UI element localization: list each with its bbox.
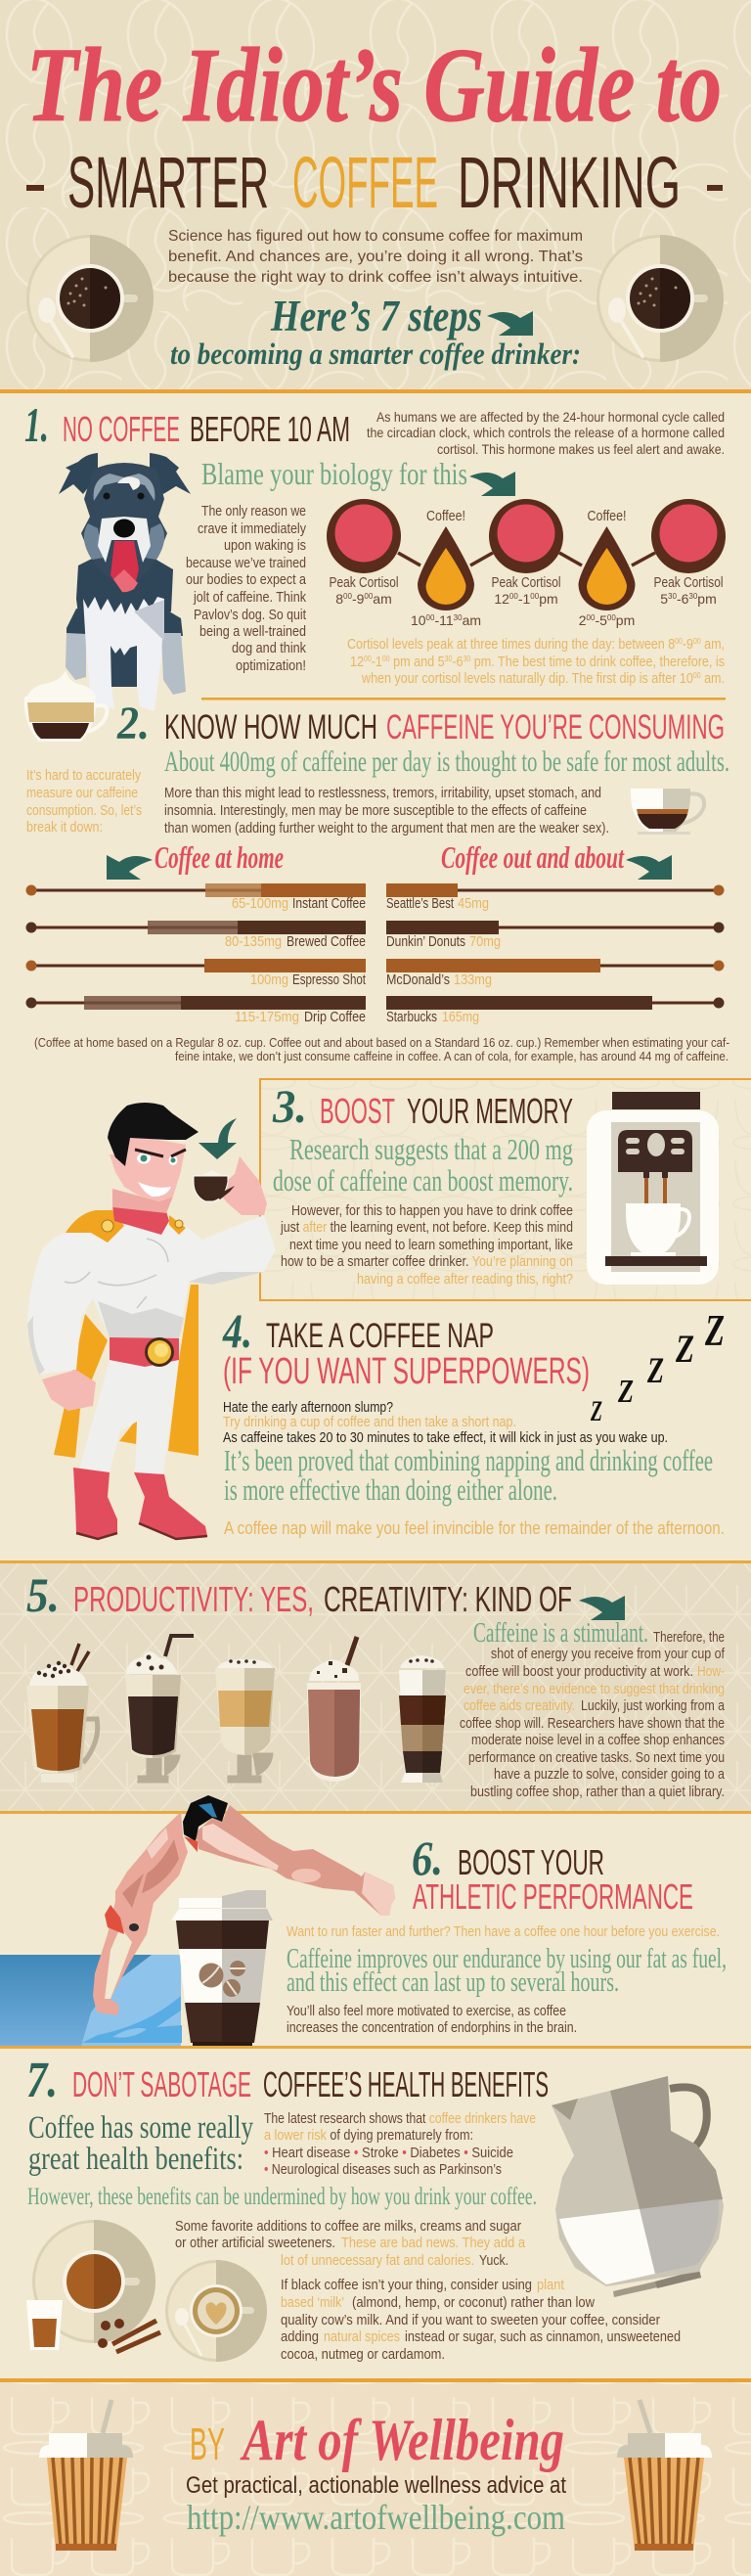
heading: step 4: TAKE A COFFEE NAP	[266, 1317, 494, 1355]
text: cortisol callout: 30	[464, 655, 471, 663]
chart labels: 30	[668, 592, 677, 601]
text: lower risk list	[264, 2111, 536, 2178]
chart labels: 00	[426, 613, 435, 622]
chart labels	[329, 508, 724, 628]
label: starbucks: 165mg	[442, 1009, 479, 1025]
label: dunkin' donuts: 70mg	[469, 933, 501, 950]
text: health benefits callout	[28, 2110, 253, 2177]
illustration: dog	[59, 453, 191, 711]
chart labels: 00	[364, 592, 374, 601]
heading: here's 7 steps: Here’s 7 steps	[270, 292, 482, 340]
chart labels: am	[373, 591, 392, 607]
text: cortisol callout: Cortisol levels peak at three times during the day: between 8	[347, 637, 728, 653]
subtitle	[26, 142, 723, 223]
text: pavlov's dog: upon waking is	[224, 538, 306, 554]
label: instant coffee: 65-100mg	[232, 895, 288, 912]
text: plant based milk: instead or sugar, such as cinnamon, unsweetened	[405, 2328, 681, 2345]
text: stimulant: How-	[697, 1663, 725, 1680]
text: break it down: It’s hard to accurately	[26, 768, 142, 784]
orange divider	[0, 389, 751, 393]
heading: step 2: 2.	[116, 698, 150, 749]
label: dunkin' donuts: Dunkin’ Donuts	[386, 933, 465, 950]
heading: step 7: DON’T SABOTAGE	[72, 2064, 251, 2104]
text: break it down: break it down:	[26, 820, 103, 836]
intro text: benefit. And chances are, you’re doing it all wrong. That’s	[168, 249, 583, 265]
label: drip coffee: Drip Coffee	[304, 1009, 366, 1025]
text: stimulant	[460, 1618, 726, 1800]
icon: sleeping z letters: Z	[675, 1327, 694, 1371]
chart labels: 00	[530, 592, 540, 601]
chart labels: -6	[677, 591, 689, 607]
text: memory callout: Research suggests that a 200 mg	[289, 1132, 573, 1166]
icon: latte cup	[24, 670, 107, 742]
orange divider	[0, 2046, 751, 2049]
text: nap body: Hate the early afternoon slump?	[223, 1400, 393, 1416]
chart labels: 8	[335, 591, 343, 607]
text: cortisol callout: 00	[693, 671, 701, 680]
illustration: drink 4	[307, 1637, 361, 1782]
chart labels: Peak Cortisol	[491, 574, 561, 591]
illustration: pool water	[0, 1955, 182, 2046]
illustration: milk jug	[552, 2076, 724, 2297]
heading: step 3	[272, 1081, 573, 1133]
text: stimulant: Caffeine is a stimulant.	[473, 1618, 648, 1649]
bar: mcdonald's	[386, 959, 724, 972]
arrow: pointing to cup	[199, 1118, 237, 1159]
illustration: drink 1	[26, 1644, 98, 1783]
heading: step 5	[26, 1567, 572, 1622]
text: additions: These are bad news. They add a	[341, 2235, 526, 2251]
text: cortisol callout: 00	[382, 655, 390, 663]
text: pavlov's dog: dog and think	[232, 641, 307, 656]
text: memory callout	[273, 1132, 573, 1198]
text: break it down: measure our caffeine	[26, 786, 138, 801]
illustration: drink 3	[215, 1659, 275, 1783]
icon: sleeping z letters: Z	[590, 1395, 602, 1427]
text: plant based milk: quality cow’s milk. And if you want to sweeten your coffee, consider	[281, 2312, 660, 2328]
text: lower risk list: • Neurological diseases such as Parkinson’s	[264, 2162, 502, 2178]
text: cortisol callout: am,	[701, 637, 725, 653]
heading: step 6	[412, 1830, 693, 1917]
text: circadian clock	[367, 409, 725, 457]
chart labels: 00	[607, 613, 616, 622]
label: espresso shot	[250, 972, 367, 988]
chart labels: -11	[434, 612, 454, 628]
icon: sleeping z letters: Z	[617, 1374, 634, 1410]
panel: step 1	[24, 397, 726, 742]
text: additions	[175, 2218, 526, 2269]
bar: seattle's best	[386, 883, 724, 897]
text: pavlov's dog: crave it immediately	[198, 521, 307, 537]
panel: footer	[0, 2378, 751, 2576]
icon: espresso machine	[587, 1092, 719, 1285]
text: plant based milk: cocoa, nutmeg or cardamom.	[281, 2346, 445, 2363]
heading: step 1: 1.	[24, 397, 49, 452]
text: memory callout: dose of caffeine can boost memory.	[273, 1163, 573, 1198]
text: nap body: As caffeine takes 20 to 30 minutes to take effect, it will kick in just as you wake up.	[223, 1430, 668, 1446]
icon: latte with heart	[165, 2260, 267, 2362]
intro text: because the right way to drink coffee isn’t always intuitive.	[168, 269, 583, 286]
text: cortisol callout: am.	[701, 671, 725, 687]
text: lower risk list: a lower risk of dying prematurely from:	[264, 2128, 473, 2144]
heading: step 5: 5.	[26, 1567, 60, 1622]
illustration: superhero	[27, 1103, 276, 1539]
chart: coffee out and about bars	[386, 883, 724, 1025]
text: stimulant: coffee will boost your productivity at work.	[465, 1663, 693, 1680]
arrow	[579, 1596, 625, 1620]
text: cortisol callout: -6	[452, 655, 464, 670]
peak cortisol 5:30-6:30pm	[651, 499, 726, 573]
icon: small coffee cup	[631, 789, 704, 835]
text: endurance callout	[287, 1943, 727, 1998]
text: nap body: Try drinking a cup of coffee and then take a short nap.	[223, 1415, 516, 1430]
illustration: diver	[93, 1795, 395, 2015]
text: cortisol callout: 00	[675, 637, 683, 646]
header panel	[0, 0, 751, 390]
arrow	[469, 472, 515, 496]
panel: step 5	[0, 1560, 751, 1814]
text: cortisol callout	[347, 637, 725, 687]
subtitle: SMARTER	[67, 142, 269, 223]
label: espresso shot: 100mg	[250, 972, 288, 988]
heading: step 4	[222, 1303, 590, 1392]
label: instant coffee: Instant Coffee	[292, 895, 366, 912]
heading: step 6: 6.	[412, 1830, 443, 1885]
chart: cortisol timeline	[327, 499, 726, 628]
intro text: Science has figured out how to consume coffee for maximum	[168, 228, 583, 245]
chart labels: 2	[579, 612, 587, 628]
chart labels: am	[463, 612, 481, 628]
heading: step 3: 3.	[272, 1081, 307, 1133]
heading: step 3: YOUR MEMORY	[407, 1091, 573, 1131]
heading: coffee out and about: Coffee out and about	[441, 839, 625, 875]
text: additions: Some favorite additions to coffee are milks, creams and sugar	[175, 2218, 521, 2235]
text: pavlov's dog: The only reason we	[201, 504, 306, 520]
text: pavlov's dog: jolt of caffeine. Think	[193, 590, 307, 606]
text: memory body: However, for this to happen you have to drink coffee	[291, 1203, 573, 1219]
heading: step 1: BEFORE 10 AM	[190, 409, 350, 449]
text: plant based milk: (almond, hemp, or coconut) rather than low	[352, 2294, 595, 2311]
text: cortisol callout: pm and 5	[390, 655, 445, 670]
icon: right takeaway cup	[617, 2400, 712, 2551]
bar: brewed coffee	[25, 921, 366, 934]
text: additions: Yuck.	[479, 2252, 508, 2269]
heading: to becoming a smarter coffee drinker: to becoming a smarter coffee drinker:	[170, 337, 581, 371]
bar: dunkin' donuts	[386, 921, 724, 934]
icon: left coffee cup from above	[26, 235, 154, 362]
label: brewed coffee	[225, 933, 366, 950]
icon: saucer with coffee, glass and cinnamon	[26, 2220, 160, 2352]
label: seattle's best: Seattle’s Best	[386, 895, 455, 912]
text: stimulant: Therefore, the	[653, 1629, 725, 1646]
label: brewed coffee: Brewed Coffee	[287, 933, 366, 950]
text: pavlov's dog: optimization!	[236, 658, 306, 674]
bar: instant coffee	[25, 883, 366, 897]
text: plant based milk: based ‘milk’	[281, 2294, 344, 2311]
text: memory body: next time you need to learn something important, like	[289, 1238, 573, 1253]
panel: step 2	[25, 698, 729, 1063]
text: endorphins: You’ll also feel more motivated to exercise, as coffee	[287, 2004, 566, 2019]
text: additions: lot of unnecessary fat and calories.	[281, 2252, 474, 2269]
text: stimulant: coffee aids creativity.	[464, 1697, 575, 1714]
label: brewed coffee: 80-135mg	[225, 933, 282, 950]
text: lower risk list: The latest research shows that coffee drinkers have	[264, 2111, 536, 2127]
chart labels: pm	[697, 591, 717, 607]
text: nap body	[223, 1400, 668, 1446]
text: lower risk list: • Heart disease • Stroke • Diabetes • Suicide	[264, 2146, 513, 2161]
chart labels: -9	[352, 591, 365, 607]
coffee drop 10-11:30am	[418, 526, 474, 610]
text: health benefits callout: Coffee has some really	[28, 2110, 253, 2146]
text: more than this	[164, 785, 609, 836]
chart labels: Peak Cortisol	[653, 574, 724, 591]
text: more than this: More than this might lead to restlessness, tremors, irritability, upset stomach, and	[164, 785, 601, 801]
text: cortisol callout: 12	[350, 655, 366, 670]
icon: sleeping z letters: Z	[704, 1305, 725, 1355]
heading: step 6: BOOST YOUR	[458, 1842, 604, 1882]
text: memory body: having a coffee after reading this, right?	[357, 1272, 573, 1288]
text: wellness advice: Get practical, actionable wellness advice at	[186, 2472, 566, 2499]
text: however callout: However, these benefits can be undermined by how you drink your coffee.	[27, 2184, 537, 2210]
text: pavlov's dog: because we’ve trained	[186, 556, 306, 571]
chart labels: Coffee!	[587, 508, 626, 524]
icon: takeaway coffee cup	[171, 1890, 273, 2047]
chart labels: 5	[660, 591, 668, 607]
chart labels: 00	[509, 592, 518, 601]
text: more than this: than women (adding further weight to the argument that men are the weaker sex).	[164, 820, 609, 836]
bar: drip coffee	[25, 996, 366, 1010]
chart labels: 00	[343, 592, 352, 601]
panel: step 4	[222, 1303, 725, 1538]
text: plant based milk	[281, 2277, 681, 2363]
heading: step 7: COFFEE’S HEALTH BENEFITS	[263, 2064, 549, 2104]
label: mcdonald's: 133mg	[454, 972, 492, 988]
chart labels: pm	[539, 591, 558, 607]
text: footnote	[34, 1035, 729, 1063]
intro text	[168, 228, 583, 286]
illustration: drink 5	[399, 1655, 446, 1783]
heading: coffee at home: Coffee at home	[155, 839, 284, 875]
text: plant based milk: If black coffee isn’t your thing, consider using	[281, 2277, 532, 2293]
text: nap callout	[224, 1443, 713, 1507]
text: cortisol callout: 00	[693, 637, 701, 646]
chart labels: 10	[411, 612, 426, 628]
text: cortisol callout: -9	[683, 637, 693, 653]
peak cortisol 12-1pm	[489, 499, 563, 573]
chart: coffee at home bars	[25, 883, 367, 1025]
text: additions: or other artificial sweeteners.	[175, 2235, 335, 2251]
text: memory body: just after the learning event, not before. Keep this mind	[280, 1220, 573, 1236]
icon: right coffee cup from above	[596, 235, 724, 362]
icon: sleeping z letters: Z	[646, 1351, 664, 1391]
chart labels: 30	[688, 592, 698, 601]
heading: step 3: BOOST	[320, 1091, 395, 1131]
heading: step 1: NO COFFEE	[63, 409, 180, 449]
illustration: drink 2	[125, 1636, 194, 1783]
text: stimulant: Luckily, just working from a	[581, 1697, 726, 1714]
bar: espresso shot	[25, 959, 366, 972]
label: instant coffee	[232, 895, 366, 912]
divider	[201, 698, 726, 700]
label: espresso shot: Espresso Shot	[292, 972, 367, 988]
chart labels: 00	[587, 613, 596, 622]
label: seattle's best: 45mg	[458, 895, 489, 912]
label: drip coffee: 115-175mg	[235, 1009, 299, 1025]
heading: step 7	[26, 2053, 549, 2108]
text: memory body	[280, 1203, 573, 1288]
panel: step 6	[0, 1795, 727, 2047]
text: cortisol callout: 30	[445, 655, 453, 663]
text: memory body: how to be a smarter coffee drinker. You’re planning on	[281, 1254, 573, 1270]
chart labels: Peak Cortisol	[329, 574, 399, 591]
text: cortisol callout: 00	[364, 655, 372, 663]
text: cortisol callout: when your cortisol levels naturally dip. The first dip is after 10	[362, 671, 744, 687]
heading: step 1	[24, 397, 350, 452]
icon: sleeping z letters	[590, 1305, 725, 1427]
chart labels: -1	[518, 591, 530, 607]
heading: step 4: 4.	[222, 1303, 252, 1358]
text: plant based milk: plant	[537, 2277, 565, 2293]
text: pavlov's dog: being a well-trained	[199, 624, 306, 640]
text: cortisol callout: -1	[372, 655, 382, 670]
text: by: BY	[190, 2418, 225, 2469]
chart labels: 12	[494, 591, 509, 607]
label: mcdonald's: McDonald’s	[386, 972, 450, 988]
heading: step 7: 7.	[26, 2053, 58, 2108]
arrow	[487, 311, 533, 336]
panel: step 7	[26, 2053, 724, 2363]
subtitle: COFFEE	[292, 142, 438, 223]
arrow	[626, 855, 672, 880]
heading: blame your biology: Blame your biology for this	[201, 456, 467, 491]
icon: left takeaway cup	[39, 2400, 133, 2551]
panel: step 3	[260, 1079, 751, 1300]
text: plant based milk: natural spices	[324, 2328, 400, 2345]
chart labels: Coffee!	[426, 508, 465, 524]
text: health benefits callout: great health benefits:	[28, 2142, 243, 2177]
text: art of wellbeing: Art of Wellbeing	[240, 2408, 564, 2472]
chart labels: 30	[454, 613, 463, 622]
peak cortisol 8-9am	[327, 499, 401, 573]
chart labels: -5	[595, 612, 607, 628]
text: break it down	[26, 768, 142, 836]
text: nap callout: is more effective than doing either alone.	[224, 1472, 557, 1507]
heading: step 5: CREATIVITY: KIND OF	[324, 1579, 572, 1619]
heading: step 2	[116, 698, 725, 749]
bar: starbucks	[386, 996, 724, 1010]
text: endorphins	[287, 2004, 577, 2036]
arrow	[107, 855, 153, 880]
text: break it down: consumption. So, let’s	[26, 803, 142, 819]
text: url: http://www.artofwellbeing.com	[187, 2498, 565, 2537]
text: plant based milk: adding	[281, 2328, 319, 2345]
coffee drop 2-5pm	[579, 526, 636, 610]
text: pavlov's dog	[186, 504, 307, 674]
text: endorphins: increases the concentration of endorphins in the brain.	[287, 2020, 577, 2036]
chart labels: pm	[616, 612, 635, 628]
text: pavlov's dog: our bodies to expect a	[186, 572, 307, 588]
heading: step 5: PRODUCTIVITY: YES,	[73, 1579, 314, 1619]
text: more than this: insomnia. Interestingly, men may be more susceptible to the effects of caffeine	[164, 802, 587, 819]
label: drip coffee	[235, 1009, 366, 1025]
label: starbucks: Starbucks	[386, 1009, 437, 1025]
heading: step 2: KNOW HOW MUCH	[164, 708, 377, 746]
text: pavlov's dog: Pavlov’s dog. So quit	[194, 608, 306, 623]
